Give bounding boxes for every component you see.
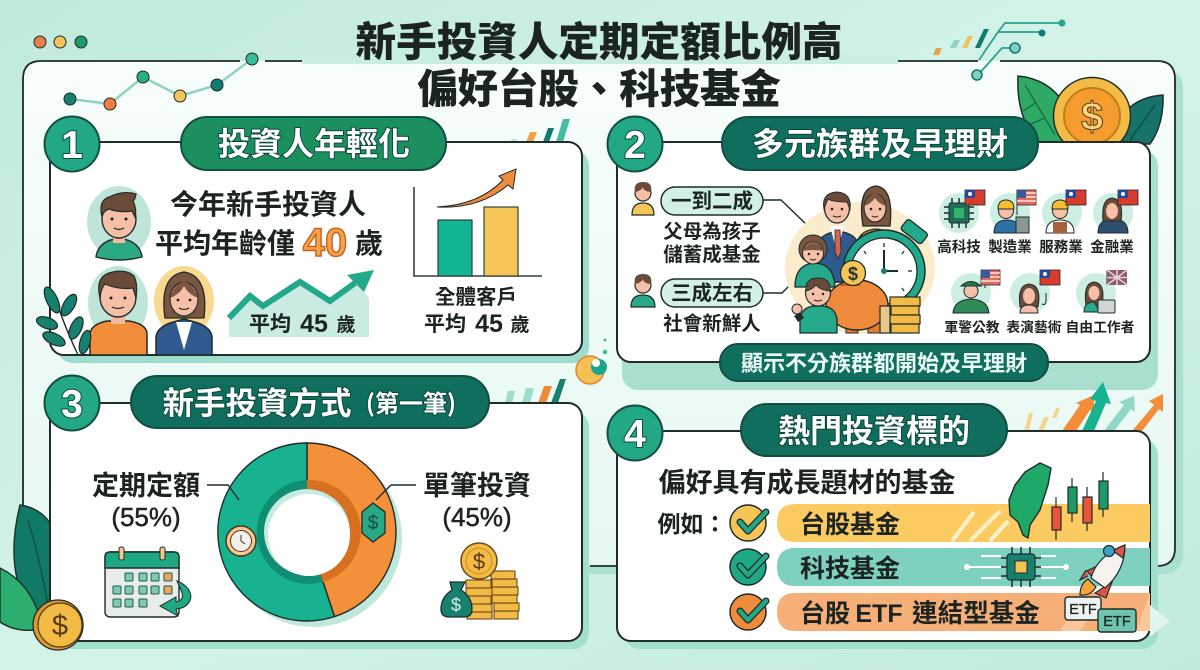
labels: industries row 1 (937, 236, 1134, 257)
label: lump sum: 單筆投資 (423, 464, 531, 503)
bar: tech fund (777, 548, 1150, 586)
decoration: light diamond (1150, 605, 1170, 637)
woman (858, 186, 894, 254)
heading 3: 新手投資方式 (162, 378, 352, 424)
circuit decoration top right (933, 20, 1066, 80)
text: all customers average 45: 45 (475, 310, 503, 338)
chart: rising trend average 45: 45 (300, 310, 328, 338)
background frame (23, 55, 1183, 574)
text: average age 40: 歲 (355, 222, 383, 262)
panel 1 bars decoration (510, 119, 570, 142)
badge 3: 3 (61, 383, 83, 426)
callout: one to twenty percent: 儲蓄成基金 (663, 238, 761, 267)
icon: freelancer (1076, 270, 1127, 313)
avatar: man in orange (88, 266, 148, 355)
icon: ETF tags: ETF (1069, 602, 1097, 618)
icon: centre swirl (576, 338, 607, 384)
text: for example: 例如： (658, 505, 726, 539)
callout: thirty percent (631, 274, 793, 336)
icon: finance (1093, 190, 1138, 233)
icon: high tech (939, 190, 985, 233)
coin on piggy (840, 260, 866, 286)
icon: leaves bottom left (0, 505, 50, 643)
badge 1: 1 (61, 124, 83, 167)
icon: coin and leaves (1018, 76, 1163, 154)
panel: popular targets (608, 404, 1158, 649)
labels: industries row 1: 服務業 (1039, 236, 1083, 257)
decoration: bars above panel 3 (505, 379, 566, 403)
text: average age 40: 平均年齡僅 (155, 222, 295, 262)
icon: candlestick chart (1052, 472, 1108, 540)
bar: Taiwan ETF feeder fund (777, 593, 1150, 631)
label: regular fixed amount (92, 464, 239, 532)
callout: thirty percent: 社會新鮮人 (663, 307, 761, 336)
icon: dollar hexagon (362, 503, 385, 542)
icon: service (1042, 190, 1086, 233)
icon: gold coin: $ (52, 610, 68, 642)
labels: industries row 1: 製造業 (988, 236, 1032, 257)
icon: money bag and coins: $ (451, 595, 461, 615)
text: average age 40 (155, 183, 383, 265)
callout: one to twenty percent: 父母為孩子 (663, 215, 761, 244)
icon: calendar (105, 547, 191, 617)
avatar: woman in navy (154, 266, 214, 355)
woman child (795, 235, 835, 287)
icon: ETF tags (1065, 597, 1136, 632)
icon: money bag and coins: $ (473, 549, 485, 574)
bar: Taiwan stock fund (777, 504, 1150, 542)
chart: rising trend average 45: 平均 (249, 308, 291, 338)
icon: manufacturing (990, 190, 1036, 233)
title: 偏好台股、科技基金 (417, 56, 781, 115)
labels: industries row 1: 高科技 (937, 236, 981, 257)
icon: ETF tags: ETF (1103, 614, 1131, 630)
icon: military (951, 270, 1000, 313)
heading 1 (181, 117, 446, 170)
bar: Taiwan ETF feeder fund: 連結型基金 (912, 593, 1040, 630)
badge 1 (44, 116, 100, 172)
labels: industries row 2 (944, 316, 1135, 336)
label: lump sum (376, 464, 531, 532)
banner: early financial planning: 顯示不分族群都開始及早理財 (741, 346, 1027, 378)
labels: industries row 2: 自由工作者 (1066, 316, 1135, 336)
badge 2: 2 (624, 124, 646, 167)
text: average age 40: 40 (303, 221, 347, 265)
man in suit (817, 192, 858, 282)
illustration: family, clock and piggy bank (785, 186, 935, 334)
labels: industries row 2: 軍警公教 (944, 316, 1000, 336)
icon: clock on donut (226, 526, 256, 556)
heading 4 (741, 404, 1007, 456)
heading 4: 熱門投資標的 (778, 406, 970, 452)
boy (792, 278, 837, 333)
icon: chip (964, 547, 1069, 587)
icon: check marks (730, 505, 766, 630)
callout: thirty percent: 三成左右 (671, 276, 753, 306)
bar: Taiwan stock fund: 台股基金 (800, 505, 900, 541)
panel: diverse groups (608, 116, 1158, 390)
stacked coins (880, 297, 920, 333)
text: all customers average 45: 歲 (510, 310, 530, 337)
bar: Taiwan ETF feeder fund: ETF (855, 600, 903, 628)
panel: investors getting younger (35, 116, 589, 363)
label: lump sum: (45%) (442, 502, 512, 532)
icon: money bag and coins (441, 543, 519, 619)
decoration: rising arrows (1024, 382, 1163, 431)
avatar: young investor (87, 186, 151, 260)
badge 3 (44, 376, 100, 430)
text: all customers average 45: 全體客戶 (435, 280, 517, 310)
badge 4 (608, 406, 662, 460)
line chart decoration (64, 53, 258, 110)
labels: industries row 1: 金融業 (1090, 236, 1134, 257)
text: growth theme funds: 偏好具有成長題材的基金 (658, 461, 956, 500)
icon: leaf branch (35, 285, 93, 355)
label: regular fixed amount: (55%) (111, 502, 181, 532)
chart: rising trend average 45: 歲 (336, 310, 356, 337)
bar chart: all customers (414, 169, 542, 276)
bar: Taiwan ETF feeder fund: 台股 (800, 594, 850, 630)
heading 2: 多元族群及早理財 (752, 119, 1008, 165)
heading 3 (131, 376, 489, 428)
text: all customers average 45 (424, 280, 530, 338)
title (356, 9, 842, 115)
label: regular fixed amount: 定期定額 (92, 464, 200, 503)
donut chart (218, 443, 402, 627)
badge 2 (608, 116, 662, 172)
heading 1: 投資人年輕化 (218, 119, 410, 165)
icon: performing arts (1010, 270, 1060, 313)
chart: rising trend average 45 (229, 270, 374, 338)
text: all customers average 45: 平均 (424, 308, 466, 338)
icon: gold coin (33, 600, 83, 650)
callout: one to twenty percent: 一到二成 (671, 184, 753, 214)
icon: three dots (34, 36, 87, 48)
text: average age 40: 今年新手投資人 (170, 183, 366, 223)
callout: one to twenty percent (632, 182, 811, 267)
icon: coin and leaves: $ (1081, 95, 1103, 139)
icon: dollar hexagon: $ (368, 513, 379, 534)
clock (843, 218, 929, 312)
panel: first investment method (33, 376, 589, 650)
heading 3: (第一筆) (366, 384, 456, 419)
coin on piggy: $ (848, 264, 858, 284)
badge 4: 4 (624, 413, 646, 456)
piggy bank (826, 280, 888, 333)
bar: tech fund: 科技基金 (800, 549, 900, 585)
icon: Taiwan map (1009, 463, 1051, 538)
icon: rocket (1080, 545, 1125, 598)
title: 新手投資人定期定額比例高 (356, 9, 842, 68)
labels: industries row 2: 表演藝術 (1006, 316, 1062, 336)
